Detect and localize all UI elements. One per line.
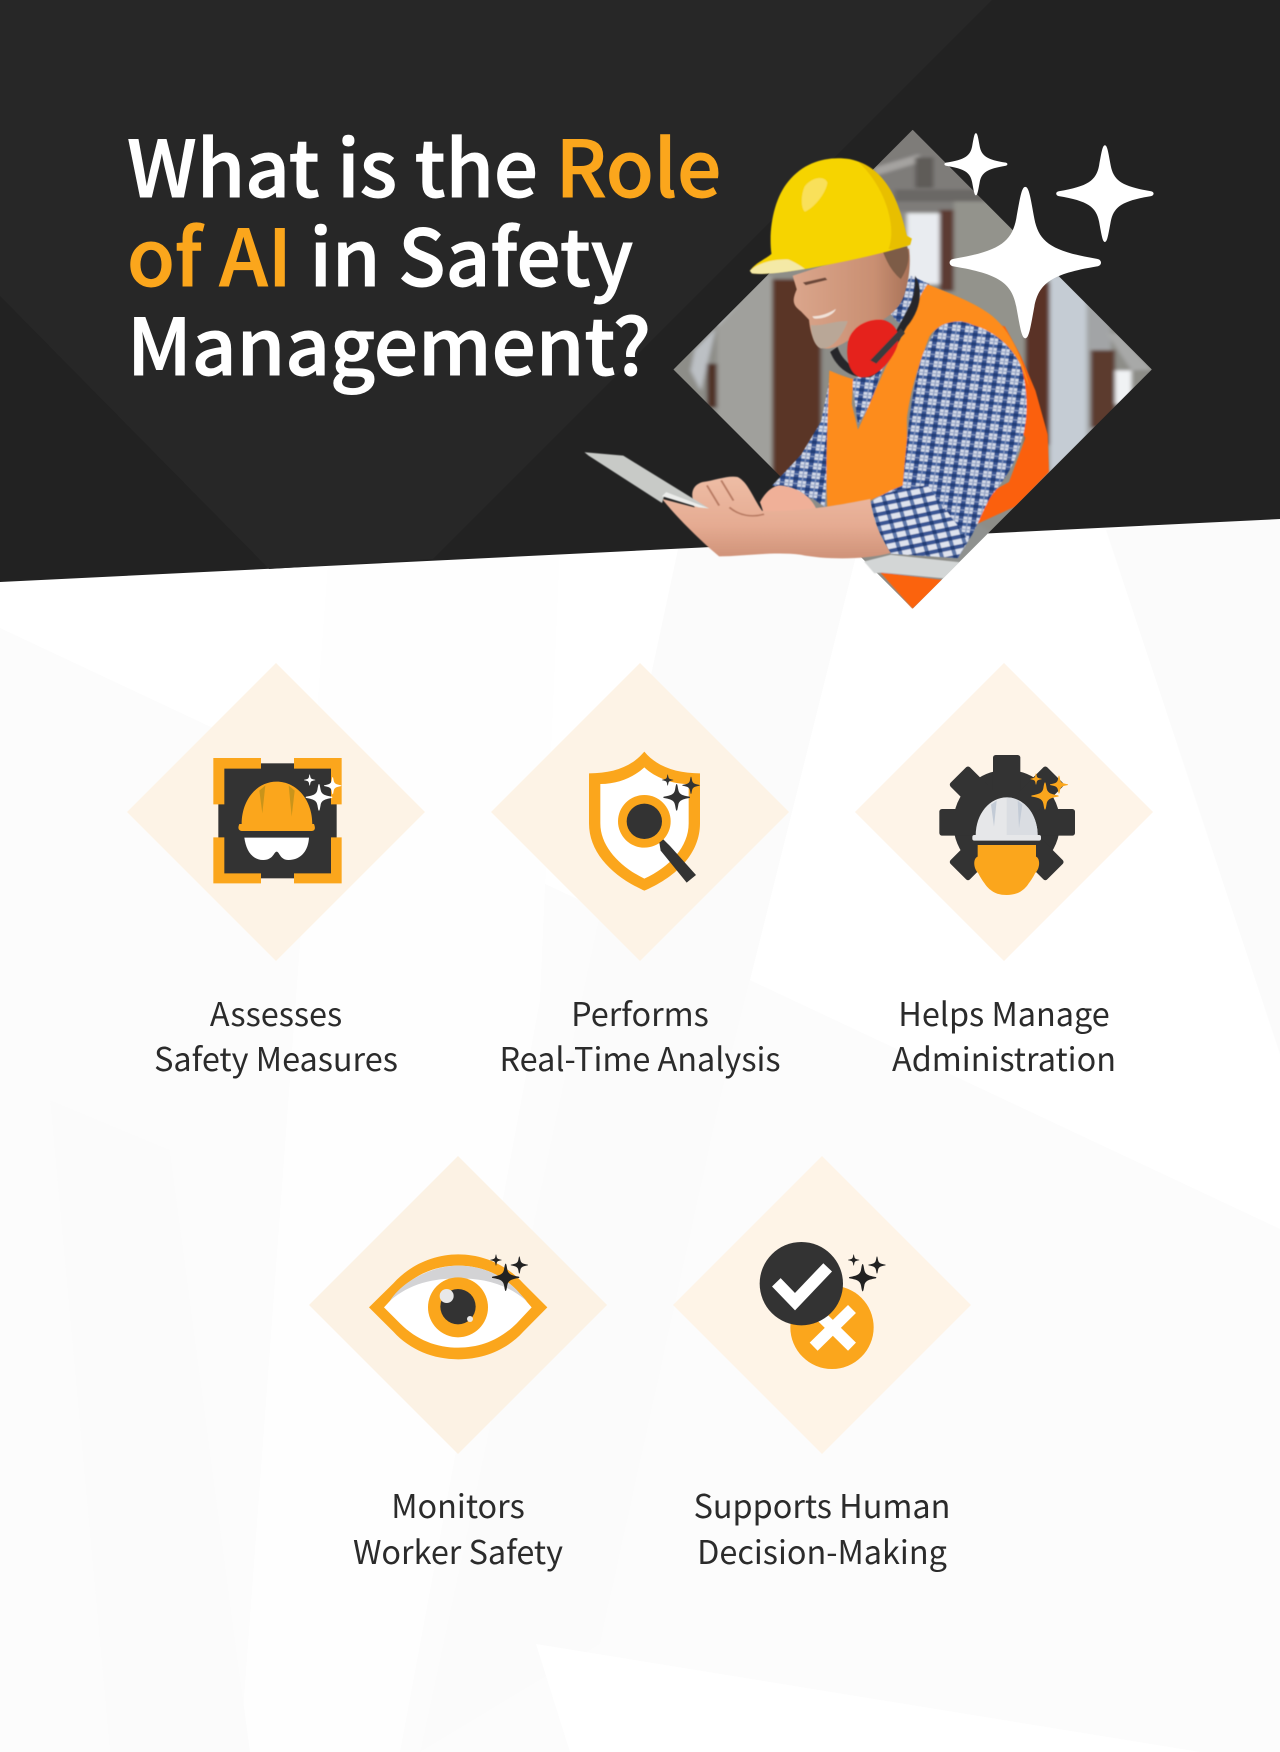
panel: Helps Manage Administration — [855, 663, 1153, 1081]
photo: worker in hard hat using tablet inside diamond — [584, 127, 1156, 610]
label: Real-Time Analysis — [499, 1034, 781, 1081]
icon: hard hat and goggles in scan frame — [213, 758, 342, 883]
label: Helps Manage — [898, 989, 1110, 1036]
photo: shirt and vest — [772, 276, 1049, 609]
photo: arm and hand — [662, 477, 891, 558]
header panel: dark slanted band — [0, 0, 1280, 582]
photo: tablet — [584, 452, 709, 508]
panel: Performs Real-Time Analysis — [491, 663, 789, 1081]
label: Safety Measures — [154, 1034, 398, 1081]
label: Supports Human — [694, 1481, 950, 1528]
photo: white sparkles — [944, 133, 1154, 338]
title: of AI in Safety — [127, 197, 633, 309]
photo background: construction site — [670, 127, 1156, 610]
label: Assesses — [210, 989, 342, 1036]
label: Administration — [892, 1034, 1116, 1081]
icon: shield with magnifier — [589, 752, 700, 891]
label: Monitors — [391, 1481, 525, 1528]
panel: Supports Human Decision-Making — [673, 1156, 971, 1574]
icon: eye — [369, 1254, 547, 1359]
title: What is the Role — [127, 108, 721, 220]
label: Performs — [571, 989, 709, 1036]
label: Decision-Making — [697, 1527, 947, 1574]
label: Worker Safety — [353, 1527, 563, 1574]
photo: yellow hard hat — [750, 158, 912, 274]
icon: check and cross circles — [760, 1242, 886, 1369]
panel: Monitors Worker Safety — [309, 1156, 607, 1574]
panel: Assesses Safety Measures — [127, 663, 425, 1081]
photo: head, ear defenders and neck — [793, 246, 920, 377]
title: Management? — [127, 286, 651, 398]
icon: gear with worker head — [939, 755, 1075, 895]
